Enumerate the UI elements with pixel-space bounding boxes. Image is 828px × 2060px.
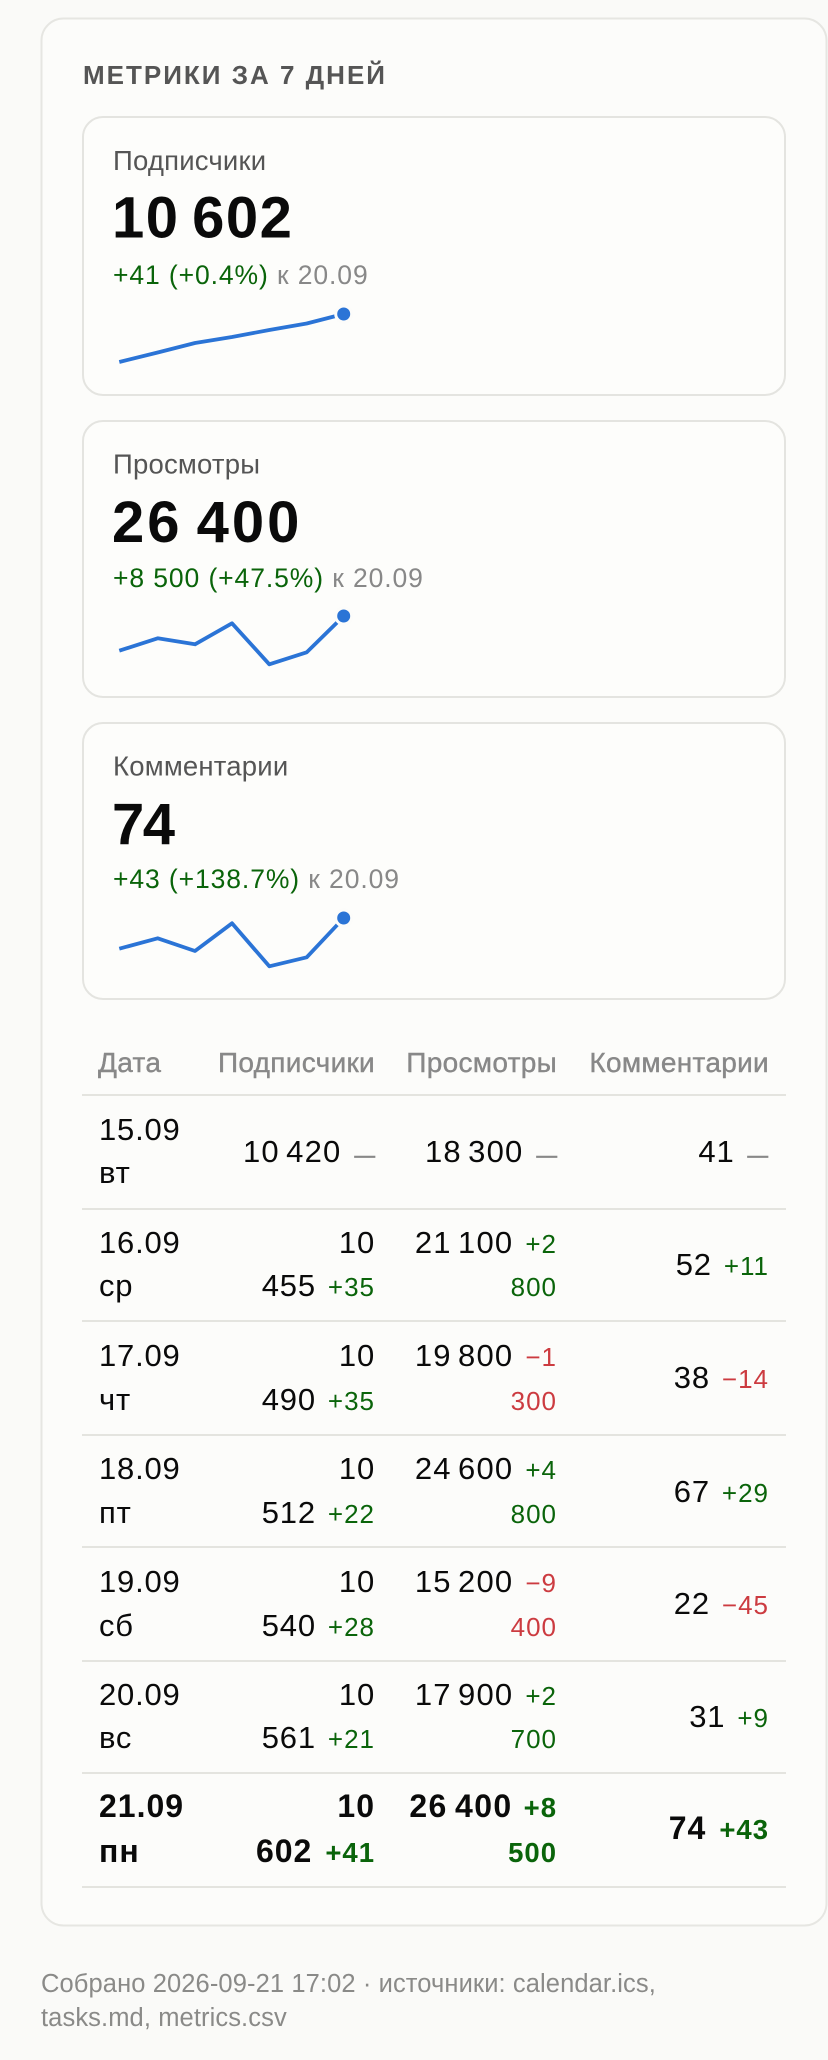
footer: Собрано 2026-09-21 17:02 · источники: calendar.ics,: [41, 1970, 656, 1998]
row 17.09: 19 800 −1: [415, 1338, 557, 1373]
row 16.09: 10: [339, 1225, 375, 1260]
label: Комментарии: [113, 750, 288, 782]
row 20.09: [99, 1677, 769, 1755]
row 20.09: вс: [99, 1720, 132, 1755]
row 20.09: 17 900 +2: [415, 1677, 557, 1712]
row 19.09: 15 200 −9: [415, 1564, 557, 1599]
row 21.09: 10: [337, 1788, 375, 1824]
sparkline: [119, 608, 352, 664]
value: 26 400: [112, 490, 302, 555]
row 18.09: [99, 1451, 769, 1530]
row 17.09: чт: [99, 1382, 131, 1417]
row 17.09: 17.09: [99, 1338, 181, 1373]
card: views: [83, 421, 785, 697]
row 16.09: 455 +35: [262, 1268, 375, 1303]
row 15.09: 18 300 —: [425, 1134, 558, 1169]
label: Подписчики: [113, 145, 266, 176]
row 18.09: 24 600 +4: [415, 1451, 557, 1486]
footer: tasks.md, metrics.csv: [41, 2004, 287, 2032]
row 18.09: 512 +22: [262, 1495, 375, 1530]
sparkline: [119, 306, 352, 362]
row 18.09: 10: [339, 1451, 375, 1486]
value: 10 602: [112, 186, 293, 250]
row 16.09: 800: [511, 1272, 557, 1302]
row 20.09: 31 +9: [689, 1699, 769, 1734]
row 20.09: 561 +21: [262, 1720, 375, 1755]
row 15.09: 10 420 —: [243, 1134, 376, 1169]
row 19.09: [99, 1564, 769, 1643]
label: Просмотры: [113, 448, 260, 480]
table header: [98, 1047, 769, 1078]
row 21.09: 602 +41: [256, 1833, 375, 1869]
delta: +41 (+0.4%) к 20.09: [113, 260, 369, 290]
row 18.09: 67 +29: [674, 1474, 769, 1509]
table header: Просмотры: [406, 1047, 557, 1078]
row 19.09: 19.09: [99, 1564, 181, 1599]
row 16.09: ср: [99, 1268, 133, 1303]
row 21.09: 74 +43: [669, 1810, 769, 1846]
row 19.09: 22 −45: [674, 1586, 769, 1621]
row 19.09: 10: [339, 1564, 375, 1599]
row 18.09: 800: [511, 1499, 557, 1529]
row 20.09: 20.09: [99, 1677, 181, 1712]
row 16.09: 16.09: [99, 1225, 181, 1260]
row 15.09: вт: [99, 1155, 131, 1190]
heading: МЕТРИКИ ЗА 7 ДНЕЙ: [83, 60, 387, 90]
row 15.09: 15.09: [99, 1112, 181, 1147]
row 17.09: [99, 1338, 769, 1417]
table header: Дата: [98, 1047, 161, 1078]
row 16.09: 52 +11: [676, 1247, 769, 1282]
row 16.09: 21 100 +2: [415, 1225, 557, 1260]
row 21.09: 21.09: [99, 1788, 184, 1824]
row 19.09: сб: [99, 1608, 134, 1643]
row 17.09: 300: [511, 1386, 557, 1416]
row 19.09: 400: [511, 1612, 557, 1642]
value: 74: [112, 792, 175, 857]
row 19.09: 540 +28: [262, 1608, 375, 1643]
row 18.09: 18.09: [99, 1451, 181, 1486]
row 20.09: 700: [511, 1724, 557, 1754]
sparkline: [119, 910, 352, 966]
row 17.09: 490 +35: [262, 1382, 375, 1417]
row 15.09: [99, 1112, 768, 1190]
delta: +43 (+138.7%) к 20.09: [113, 864, 400, 894]
row 21.09: 26 400 +8: [409, 1788, 557, 1824]
row 21.09: 500: [508, 1837, 557, 1868]
card: subscribers: [83, 117, 785, 395]
row 21.09: [99, 1788, 769, 1869]
card: comments: [83, 723, 785, 999]
row 18.09: пт: [99, 1495, 132, 1530]
table header: Комментарии: [589, 1047, 769, 1078]
row 20.09: 10: [339, 1677, 375, 1712]
row 17.09: 38 −14: [674, 1360, 769, 1395]
footer: [41, 1970, 656, 2032]
table: [82, 1047, 786, 1887]
delta: +8 500 (+47.5%) к 20.09: [113, 563, 424, 593]
row 17.09: 10: [339, 1338, 375, 1373]
row 16.09: [99, 1225, 769, 1303]
table header: Подписчики: [218, 1047, 375, 1078]
row 15.09: 41 —: [698, 1134, 768, 1169]
row 21.09: пн: [99, 1833, 140, 1869]
